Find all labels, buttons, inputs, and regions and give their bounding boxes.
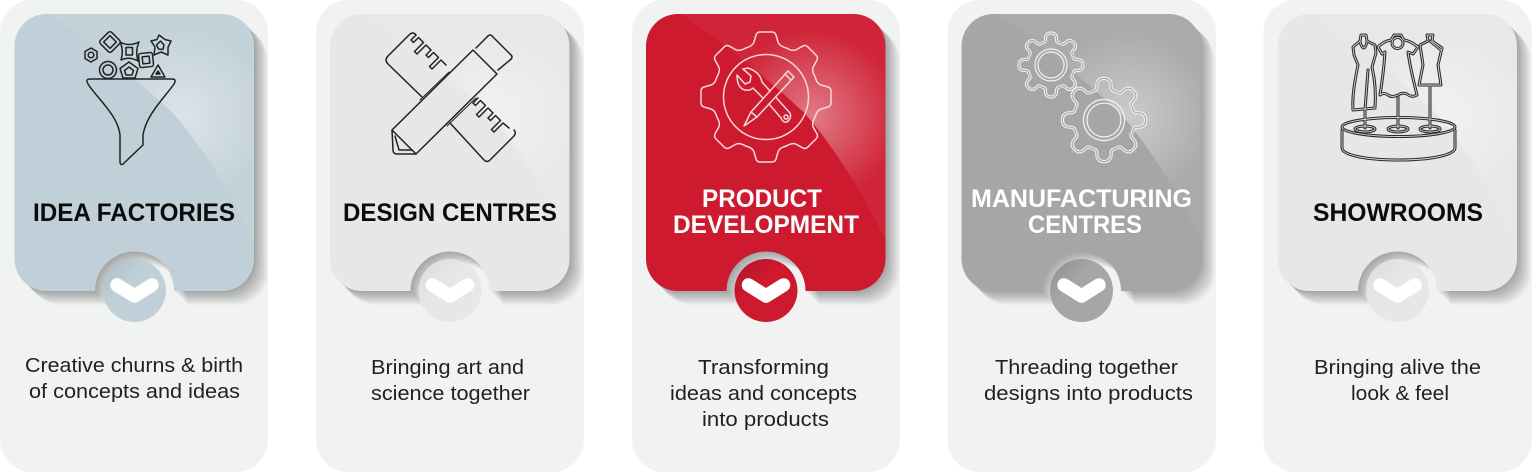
chevron button [103, 259, 166, 322]
heading: IDEA FACTORIES [33, 199, 235, 227]
icon: funnel with shapes [85, 31, 175, 165]
description: look & feel [1351, 383, 1449, 405]
panel background [316, 0, 584, 472]
gloss [1432, 98, 1464, 132]
chevron button [1366, 259, 1429, 322]
icon: dresses on display stand [1342, 35, 1455, 160]
description: of concepts and ideas [29, 381, 240, 403]
panel background [0, 0, 268, 472]
panel: design centres [316, 0, 584, 472]
chevron button [418, 259, 482, 322]
gloss [1071, 42, 1201, 179]
gloss [482, 98, 516, 132]
description: Bringing alive the [1314, 357, 1481, 379]
description: into products [702, 409, 829, 431]
description [670, 357, 857, 431]
panel: showrooms [1264, 0, 1532, 472]
icon: gear with wrench and pencil [701, 32, 831, 162]
description: designs into products [984, 383, 1193, 405]
panel: manufacturing centres [948, 0, 1216, 472]
description: Threading together [995, 357, 1178, 379]
description [1314, 357, 1481, 405]
description [25, 355, 243, 403]
card [646, 14, 886, 291]
heading: MANUFACTURING [971, 185, 1192, 213]
panel background [632, 0, 900, 472]
heading: CENTRES [1028, 211, 1142, 239]
description: ideas and concepts [670, 383, 857, 405]
heading [673, 185, 859, 239]
description: Bringing art and [371, 357, 524, 379]
heading: DEVELOPMENT [673, 211, 859, 239]
description: Creative churns & birth [25, 355, 243, 377]
card shadow [16, 15, 268, 305]
heading [971, 185, 1192, 239]
description [371, 357, 530, 405]
card [330, 14, 570, 291]
heading: PRODUCT [702, 185, 822, 213]
gloss [682, 14, 886, 240]
card [1278, 14, 1517, 291]
description: Transforming [698, 357, 829, 379]
panel background [948, 0, 1216, 472]
gloss [132, 51, 247, 171]
heading: SHOWROOMS [1313, 199, 1483, 227]
card shadow [647, 15, 900, 305]
chevron button [734, 259, 798, 322]
card shadow [331, 15, 584, 305]
card [14, 14, 254, 291]
chevron button [1050, 259, 1113, 322]
panel: idea factories [0, 0, 268, 472]
card shadow [962, 15, 1215, 305]
icon: ruler and pencil [386, 33, 515, 162]
icon: two gears [1019, 33, 1146, 162]
card shadow [1278, 15, 1531, 305]
description: science together [371, 383, 530, 405]
description [984, 357, 1193, 405]
panel: product development [632, 0, 900, 472]
card [962, 14, 1201, 291]
heading: DESIGN CENTRES [343, 199, 557, 227]
panel background [1264, 0, 1532, 472]
